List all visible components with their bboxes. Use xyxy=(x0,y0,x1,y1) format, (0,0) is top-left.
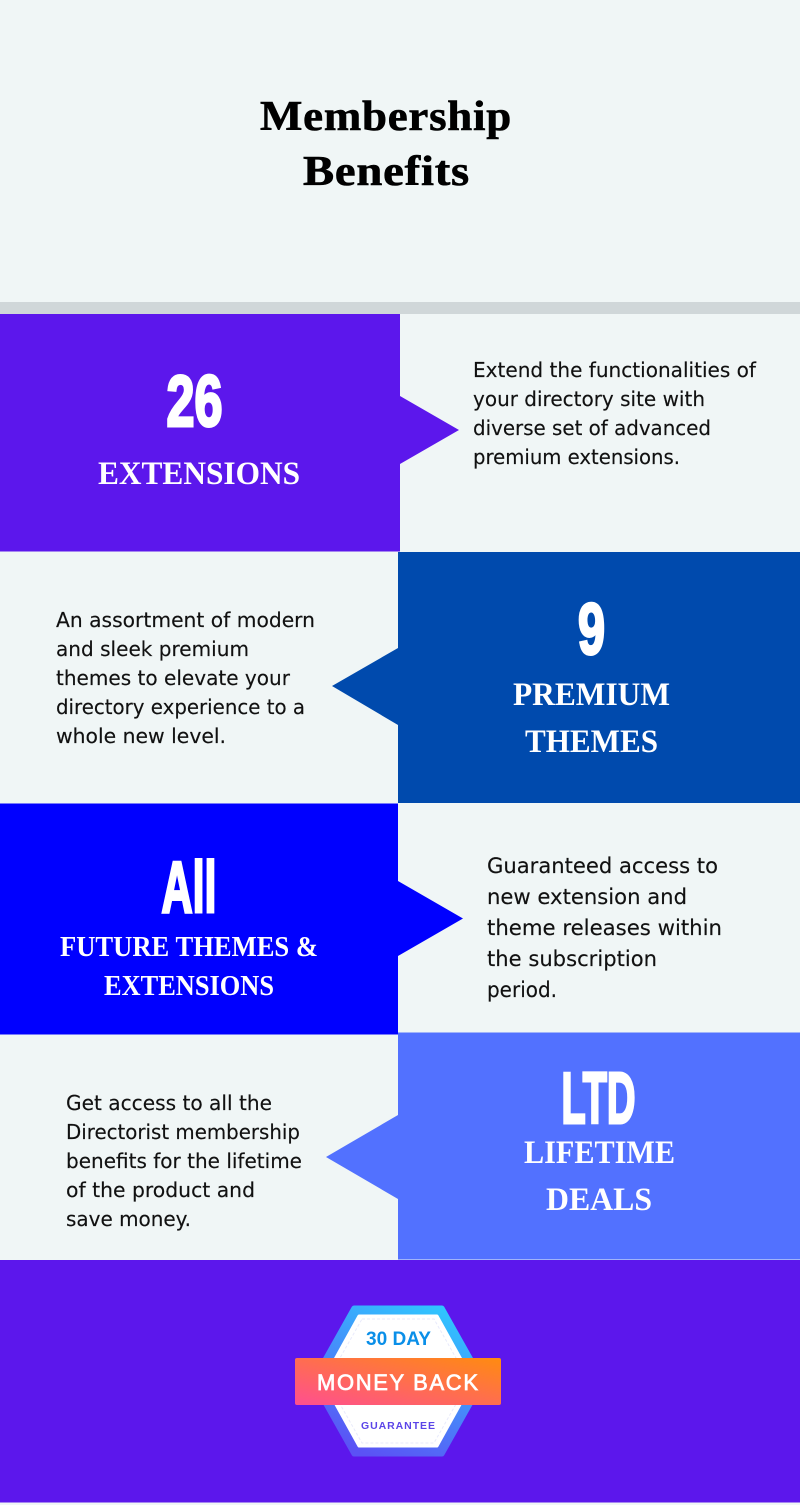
label: lifetime deals: LIFETIME xyxy=(524,1135,675,1171)
badge white inner xyxy=(323,1316,473,1446)
text: lifetime deals description: of the product and xyxy=(66,1178,255,1202)
label: premium themes: PREMIUM xyxy=(513,677,670,713)
label: lifetime deals: DEALS xyxy=(546,1182,652,1218)
text: future description: new extension and xyxy=(487,885,687,910)
badge text: money back: MONEY BACK xyxy=(317,1370,478,1395)
text: extensions description: Extend the functionalities of xyxy=(473,358,757,382)
text: extensions description: diverse set of advanced xyxy=(473,416,711,440)
panel: premium themes xyxy=(332,552,800,803)
badge: 30 day money back guarantee xyxy=(295,1308,501,1454)
badge dashed stitch xyxy=(327,1319,469,1443)
footer band xyxy=(0,1260,800,1502)
number: 26: 26 xyxy=(166,362,222,442)
label: premium themes: THEMES xyxy=(525,724,658,760)
text: future description: theme releases within xyxy=(487,916,722,941)
label: future themes and extensions: EXTENSIONS xyxy=(104,971,274,1002)
arrow panel: lifetime deals xyxy=(326,1032,800,1260)
badge ribbon xyxy=(295,1358,501,1405)
text: extensions description: your directory site with xyxy=(473,387,705,411)
label: lifetime deals xyxy=(524,1135,675,1218)
arrow panel: future xyxy=(0,804,463,1034)
panel: lifetime deals xyxy=(326,1032,800,1260)
panel: extensions xyxy=(0,314,459,552)
panel: future themes and extensions xyxy=(0,804,463,1034)
text: lifetime deals description: Get access to all the xyxy=(66,1091,272,1115)
text: extensions description: premium extensions. xyxy=(473,445,680,469)
text: premium themes description: and sleek premium xyxy=(56,637,249,661)
label: future themes and extensions: FUTURE THEMES & xyxy=(60,932,318,963)
text: premium themes description: whole new level. xyxy=(56,724,226,748)
arrow panel: extensions xyxy=(0,314,459,552)
text: future description: period. xyxy=(487,978,557,1003)
badge text: guarantee: GUARANTEE xyxy=(361,1420,435,1432)
label: premium themes xyxy=(513,677,670,760)
text: premium themes description xyxy=(56,608,315,748)
text: future description xyxy=(487,854,722,1003)
text: extensions description xyxy=(473,358,757,469)
text: lifetime deals description: save money. xyxy=(66,1207,191,1231)
arrow panel: premium themes xyxy=(332,552,800,803)
label: extensions: EXTENSIONS xyxy=(98,456,300,492)
label: future themes and extensions xyxy=(60,932,318,1002)
text: premium themes description: directory experience to a xyxy=(56,695,305,719)
text: future description: the subscription xyxy=(487,947,657,972)
number: LTD: LTD xyxy=(562,1059,636,1139)
header divider band xyxy=(0,302,800,314)
badge hexagon ring xyxy=(313,1308,483,1454)
text: lifetime deals description: benefits for the lifetime xyxy=(66,1149,302,1173)
text: premium themes description: themes to elevate your xyxy=(56,666,291,690)
title xyxy=(260,94,512,195)
number: All: All xyxy=(162,848,216,928)
title: Membership xyxy=(260,94,512,140)
number: 9: 9 xyxy=(578,590,605,670)
badge text: 30 day: 30 DAY xyxy=(366,1329,431,1350)
text: lifetime deals description: Directorist membership xyxy=(66,1120,300,1144)
text: premium themes description: An assortment of modern xyxy=(56,608,315,632)
title: Benefits xyxy=(303,149,470,195)
text: future description: Guaranteed access to xyxy=(487,854,718,879)
text: lifetime deals description xyxy=(66,1091,302,1231)
